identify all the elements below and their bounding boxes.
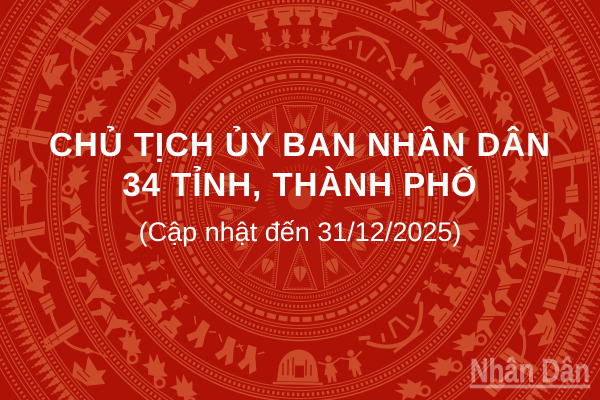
- title line 1: CHỦ TỊCH ỦY BAN NHÂN DÂN: [49, 126, 551, 163]
- second ring band: [96, 0, 504, 400]
- concentric inner bands: [157, 54, 443, 340]
- update date subtitle: (Cập nhật đến 31/12/2025): [139, 217, 461, 247]
- inner star medallion: [207, 104, 393, 290]
- title line 2: 34 TỈNH, THÀNH PHỐ: [122, 166, 478, 203]
- animal band: deer and birds: [61, 0, 538, 400]
- figure band: boats, houses, drummers, dancers: [120, 6, 485, 384]
- star panels with eye motifs: [207, 106, 393, 290]
